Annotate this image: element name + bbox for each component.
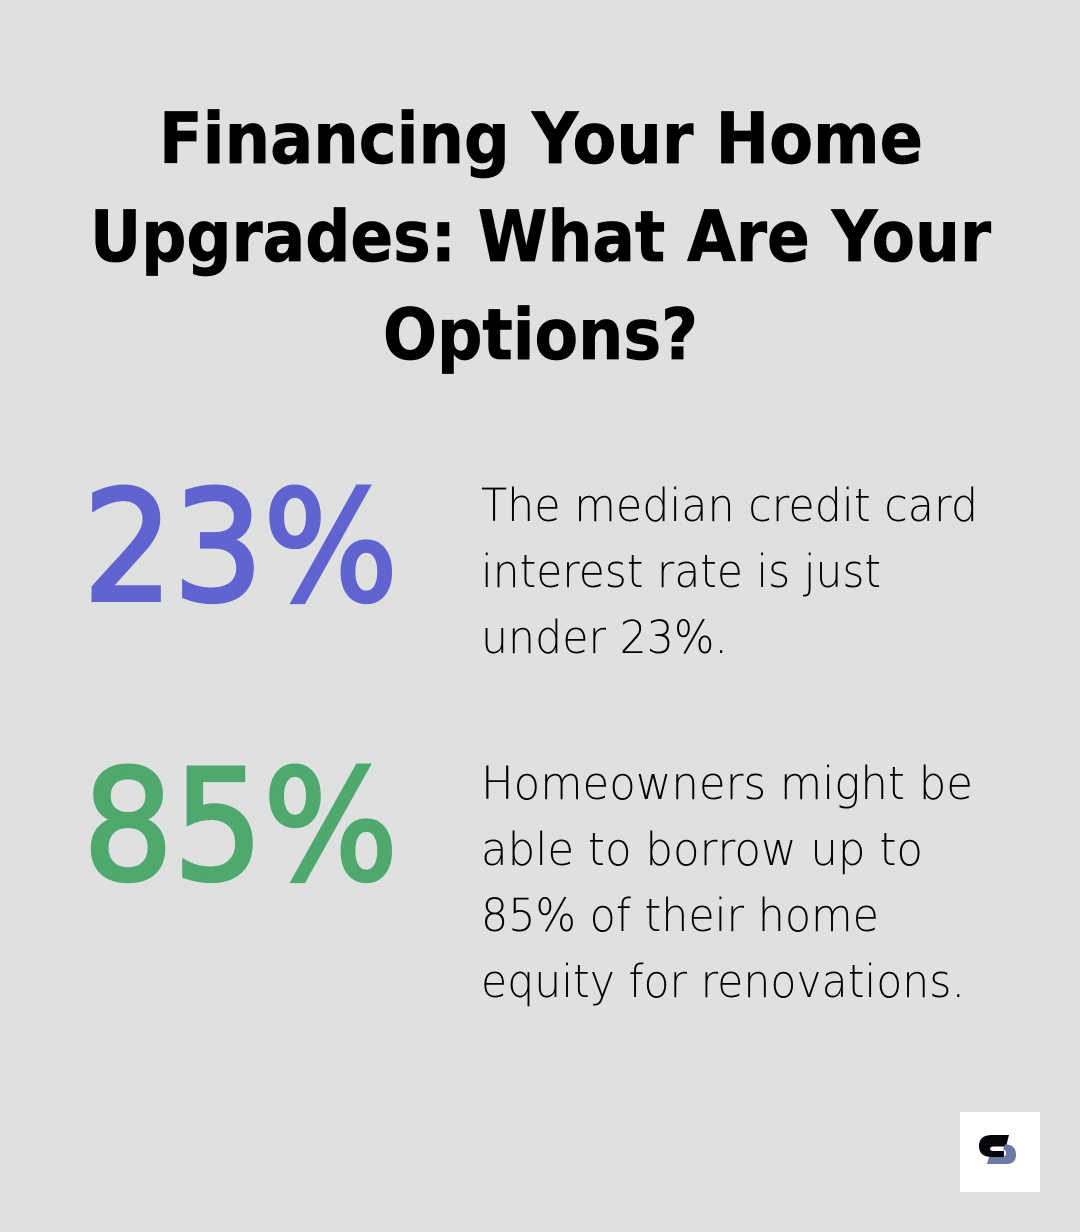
title: Options? — [383, 294, 698, 376]
text: home equity borrowing: 85% of their home — [481, 889, 879, 942]
logo badge — [960, 1112, 1040, 1192]
title: Financing Your Home — [159, 98, 923, 180]
stat: 23%: 23% — [83, 459, 398, 637]
text: credit card rate: under 23%. — [481, 611, 728, 664]
text: home equity borrowing: equity for renovations. — [481, 955, 965, 1008]
text: home equity borrowing: able to borrow up to — [481, 823, 923, 876]
text: home equity borrowing — [481, 757, 973, 1008]
text: credit card rate — [481, 479, 978, 664]
icon: logo mark — [979, 1135, 1016, 1164]
stat: 85%: 85% — [83, 738, 398, 916]
text: home equity borrowing: Homeowners might be — [481, 757, 973, 810]
title: Upgrades: What Are Your — [90, 196, 991, 278]
text: credit card rate: The median credit card — [481, 479, 978, 532]
title — [90, 98, 991, 376]
text: credit card rate: interest rate is just — [481, 545, 881, 598]
